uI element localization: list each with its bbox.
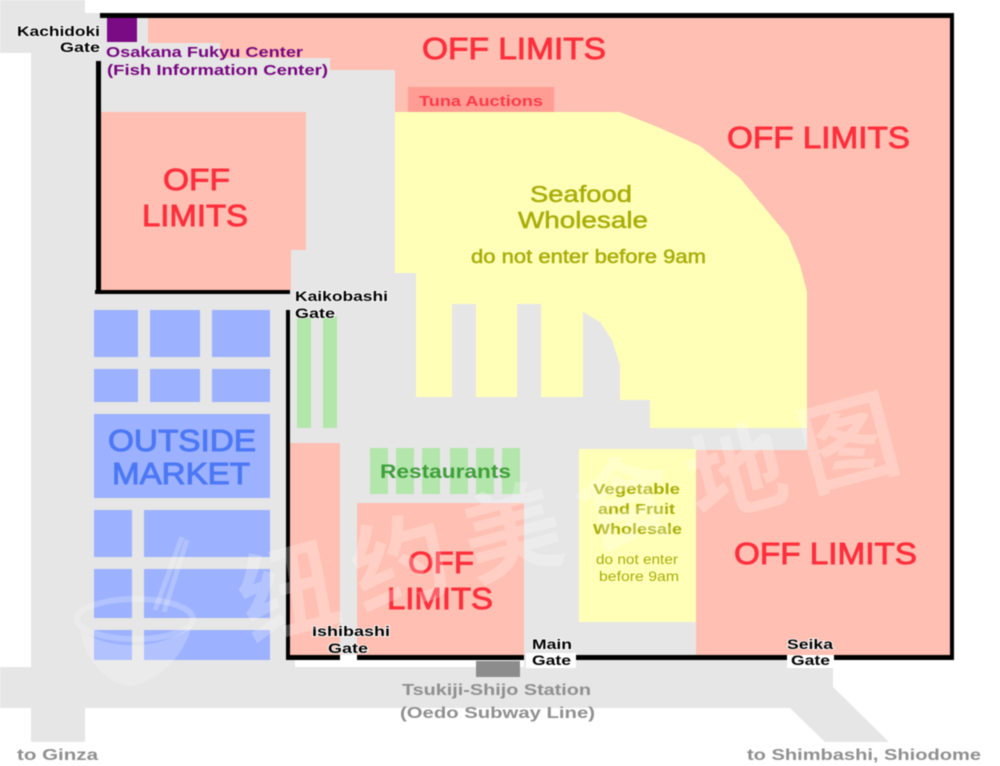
Kachidoki Gate label: Gate	[60, 39, 100, 55]
Kaikobashi Gate label: Kaikobashi	[295, 288, 388, 304]
off limits label: centre: OFF	[408, 545, 474, 580]
vegetable and fruit wholesale area	[579, 449, 696, 622]
seafood wholesale label: Seafood	[530, 181, 632, 207]
Ishibashi Gate label	[312, 623, 390, 656]
seafood wholesale label	[471, 181, 706, 268]
off limits label: right: OFF LIMITS	[727, 120, 910, 155]
subway station label: Tsukiji-Shijo Station	[402, 682, 591, 699]
vegetable and fruit wholesale label: before 9am	[599, 568, 679, 584]
Kachidoki Gate label: Kachidoki	[17, 23, 100, 39]
gate openings	[340, 653, 834, 668]
market boundary walls	[95, 13, 954, 660]
Osakana Fukyu Center label	[106, 44, 328, 79]
Seika Gate label	[787, 636, 833, 668]
Ishibashi Gate label: Gate	[328, 640, 368, 656]
subway station label: (Oedo Subway Line)	[400, 705, 595, 722]
off limits label: southeast: OFF LIMITS	[734, 536, 917, 571]
vegetable and fruit wholesale label: and Fruit	[598, 501, 675, 518]
watermark: bowl icon	[77, 537, 193, 686]
off limits label: northwest: OFF	[163, 162, 230, 197]
subway station label	[400, 682, 595, 722]
outside market label: MARKET	[112, 456, 250, 491]
vegetable and fruit wholesale label: Vegetable	[593, 481, 680, 498]
off limits label: top: OFF LIMITS	[422, 31, 606, 66]
watermark: site name: 纽约美食地图	[221, 351, 930, 668]
Osakana Fukyu Center marker	[107, 17, 137, 42]
seafood wholesale label: Wholesale	[518, 207, 648, 233]
to Shimbashi label: to Shimbashi, Shiodome	[747, 747, 981, 764]
green restaurant strips	[370, 448, 520, 494]
off limits label: centre: LIMITS	[387, 581, 493, 616]
off limits label: centre	[387, 545, 493, 616]
outside market blocks	[94, 310, 270, 660]
to Ginza label: to Ginza	[17, 747, 98, 764]
outside market label: OUTSIDE	[108, 423, 256, 458]
Osakana Fukyu Center label: Osakana Fukyu Center	[106, 44, 303, 61]
Kaikobashi Gate label	[295, 288, 388, 321]
Main Gate label: Gate	[532, 652, 571, 668]
off limits area: north and east	[148, 17, 950, 655]
seafood wholesale area	[395, 112, 807, 428]
off limits label: northwest: LIMITS	[142, 198, 248, 233]
subway station marker	[476, 661, 520, 677]
Seika Gate label: Gate	[791, 652, 830, 668]
vegetable and fruit wholesale label: do not enter	[596, 551, 678, 567]
Kachidoki Gate label	[17, 23, 100, 55]
Main Gate label	[532, 636, 572, 668]
off limits label: northwest	[142, 162, 248, 233]
outside market label	[108, 423, 256, 491]
tuna auctions box	[408, 87, 554, 112]
restaurants label: Restaurants	[380, 462, 511, 483]
Seika Gate label: Seika	[787, 636, 833, 652]
Kaikobashi Gate label: Gate	[295, 305, 335, 321]
vegetable and fruit wholesale label: Wholesale	[593, 521, 682, 538]
Osakana Fukyu Center label: (Fish Information Center)	[107, 62, 328, 79]
seafood wholesale label: do not enter before 9am	[471, 247, 706, 268]
vegetable and fruit wholesale label	[593, 481, 682, 584]
green restaurant strips near Kaikobashi	[297, 316, 337, 428]
off limits area: west strip	[290, 443, 340, 655]
Ishibashi Gate label: Ishibashi	[312, 623, 390, 639]
off limits area: northwest	[100, 112, 306, 290]
Main Gate label: Main	[532, 636, 572, 652]
off limits area: centre	[357, 503, 524, 655]
tuna auctions box: Tuna Auctions	[419, 93, 543, 110]
